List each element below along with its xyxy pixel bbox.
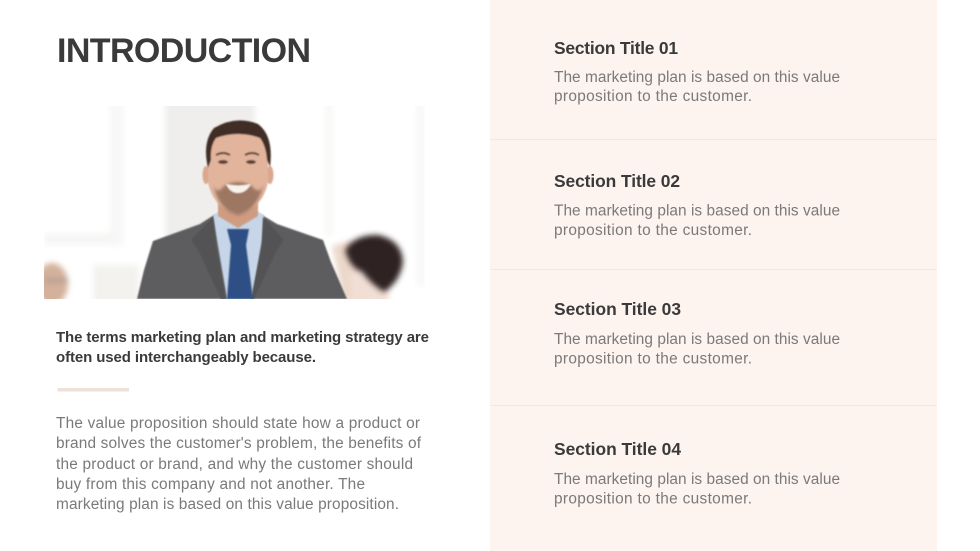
head [202,120,274,215]
section 01 [554,38,840,105]
photo: smiling businessman [44,106,408,299]
section 02: The marketing plan is based on this value [554,202,840,220]
body paragraph: marketing plan is based on this value proposition. [56,496,399,513]
lead statement: The terms marketing plan and marketing strategy are [56,329,429,346]
panel: sections [490,0,937,551]
photo background [46,106,256,299]
section 01: proposition to the customer. [554,88,752,105]
shirt [213,210,264,299]
title: INTRODUCTION [57,32,311,70]
brows [216,153,259,155]
tie [227,229,253,299]
section 02: proposition to the customer. [554,222,752,239]
hair [206,120,271,168]
section 03: The marketing plan is based on this value [554,331,840,348]
skin [330,238,360,299]
suit jacket [137,215,347,299]
lapels [191,217,284,299]
body paragraph: The value proposition should state how a product or [56,415,420,432]
section 03: Section Title 03 [554,299,681,319]
body paragraph [56,415,422,513]
hair [345,235,403,292]
right blurred person [332,235,403,303]
body paragraph: brand solves the customer's problem, the benefits of [56,435,422,452]
smile [226,184,251,193]
section 04 [554,439,840,508]
section 04: proposition to the customer. [554,490,752,508]
section 04: Section Title 04 [554,439,681,459]
eyes [218,160,228,164]
neck [217,202,259,228]
face [208,132,268,214]
section 04: The marketing plan is based on this value [554,471,840,488]
section 02: Section Title 02 [554,171,680,191]
ears [202,166,210,184]
accent rule [58,388,129,392]
section 01: Section Title 01 [554,38,678,58]
section 03 [554,299,840,368]
section 01: The marketing plan is based on this value [554,69,840,86]
lead statement [56,329,429,366]
beard [213,182,264,215]
section 02 [554,171,840,239]
section 03: proposition to the customer. [554,350,752,368]
body paragraph: the product or brand, and why the customer should [56,456,413,473]
body paragraph: buy from this company and not another. The [56,476,365,493]
left blurred person [44,260,72,299]
lead statement: often used interchangeably because. [56,349,316,366]
